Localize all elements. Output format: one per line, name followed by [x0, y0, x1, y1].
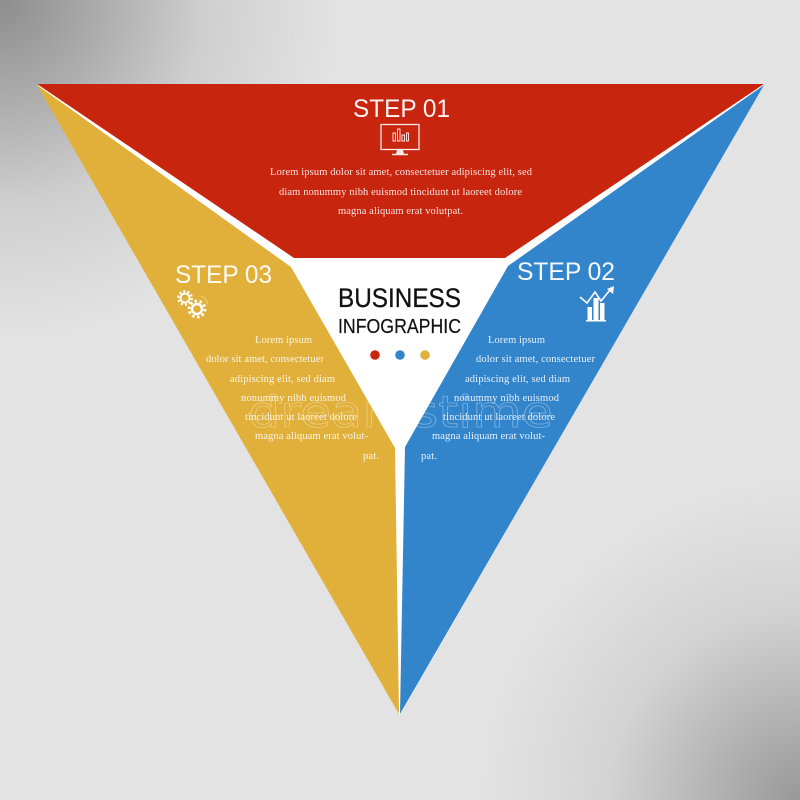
text block: step 01: Lorem ipsum dolor sit amet, consectetuer adipiscing elit, sed: [270, 167, 533, 178]
text block: step 03: dolor sit amet, consectetuer: [206, 354, 324, 365]
panel: step 02 blue: [400, 85, 764, 714]
heading: step 03: STEP 03: [175, 261, 272, 289]
icon: growth chart: [580, 286, 614, 322]
text block: step 03: adipiscing elit, sed diam: [230, 374, 335, 385]
text block: step 03: [206, 335, 379, 462]
heading: step 02: STEP 02: [517, 258, 615, 286]
heading: step 01: STEP 01: [353, 95, 450, 123]
text block: step 03: magna aliquam erat volut-: [255, 431, 368, 442]
center title: [338, 283, 461, 360]
text block: step 03: nonummy nibh euismod: [241, 393, 347, 404]
heading: business: BUSINESS: [338, 283, 461, 313]
text block: step 02: Lorem ipsum: [488, 335, 545, 346]
text block: step 03: Lorem ipsum: [255, 335, 312, 346]
panel: step 01 red: [37, 84, 764, 258]
text block: step 01: magna aliquam erat volutpat.: [338, 206, 463, 217]
icon: gears: [178, 291, 208, 317]
text block: step 02: [421, 335, 596, 462]
text block: step 03: pat.: [363, 451, 379, 462]
text block: step 01: [270, 167, 533, 217]
text block: step 01: diam nonummy nibh euismod tincidunt ut laoreet dolore: [279, 187, 522, 198]
colour dots: [370, 350, 430, 360]
text block: step 02: adipiscing elit, sed diam: [465, 374, 570, 385]
icon: monitor with bar chart: [381, 124, 419, 154]
watermark: dreamstime: [248, 387, 553, 438]
heading: infographic: INFOGRAPHIC: [338, 316, 461, 338]
text block: step 02: pat.: [421, 451, 437, 462]
text block: step 02: magna aliquam erat volut-: [432, 431, 546, 442]
text block: step 02: nonummy nibh euismod: [454, 393, 560, 404]
text block: step 02: tincidunt ut laoreet dolore: [443, 412, 555, 423]
white triangle base: [37, 84, 764, 715]
panel: step 03 yellow: [37, 85, 399, 714]
text block: step 02: dolor sit amet, consectetuer: [476, 354, 596, 365]
text block: step 03: tincidunt ut laoreet dolore: [245, 412, 357, 423]
